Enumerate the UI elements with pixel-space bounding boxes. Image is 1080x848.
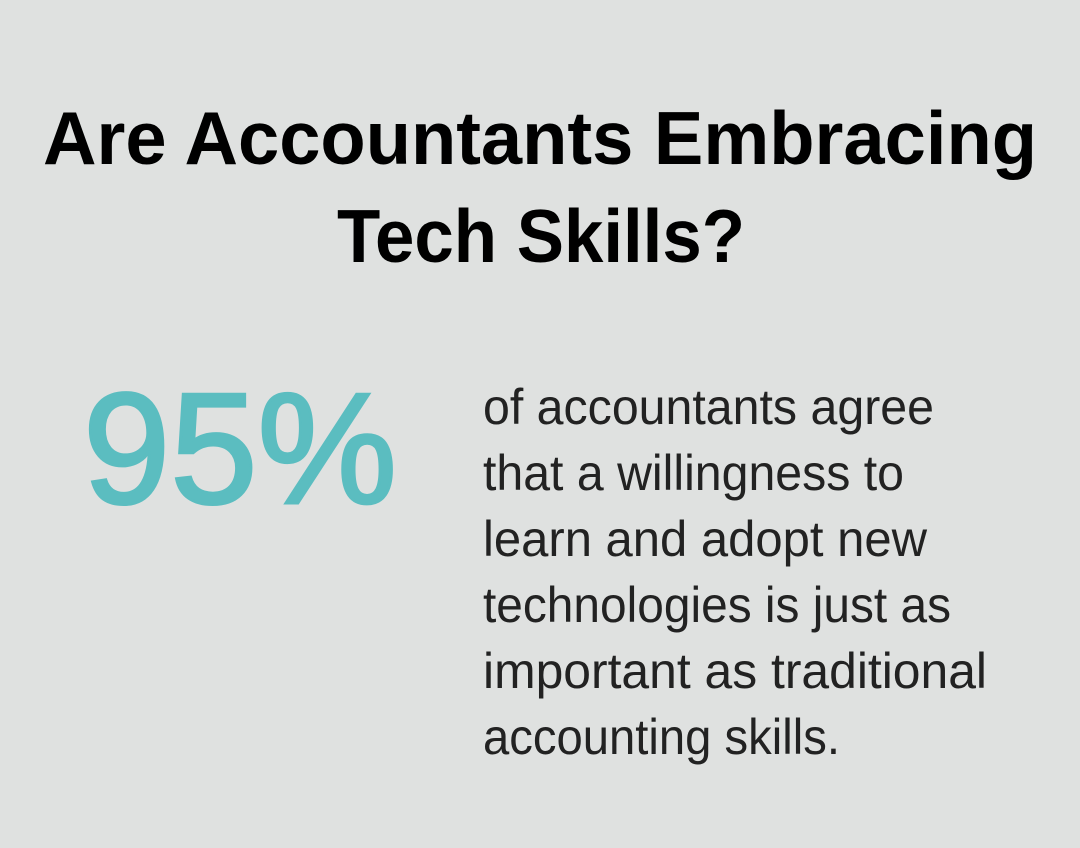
title: Tech Skills?: [337, 194, 745, 278]
description text: accounting skills.: [483, 709, 840, 765]
description text: that a willingness to: [483, 445, 904, 501]
description text: technologies is just as: [483, 577, 951, 633]
title: Are Accountants Embracing: [43, 96, 1037, 180]
big statistic: 95%: 95%: [83, 361, 397, 537]
description text: important as traditional: [483, 643, 987, 699]
description text: learn and adopt new: [483, 511, 928, 567]
description text: of accountants agree: [483, 379, 934, 435]
description text: [483, 379, 987, 765]
title: [43, 96, 1037, 278]
